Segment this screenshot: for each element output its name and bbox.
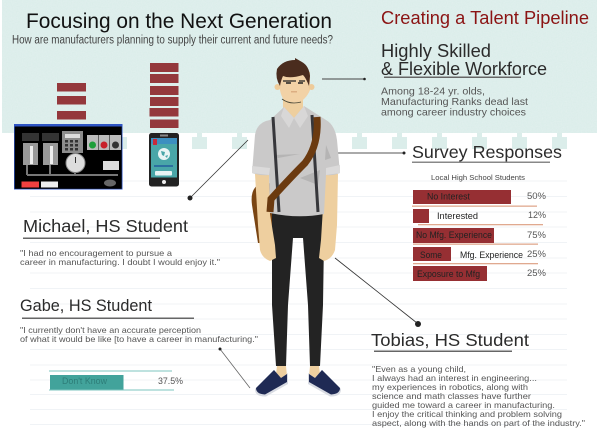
panel: teal header background (2, 0, 597, 149)
caption: local high school students: Local High School Students (431, 175, 526, 182)
bar chart: survey responses: Exposure to Mfg (417, 269, 480, 280)
heading: michael: Michael, HS Student (23, 216, 188, 236)
bar chart: survey responses: 75% (527, 230, 547, 241)
quote: gabe: of what it would be like [to have a career in manufacturing." (20, 334, 258, 344)
heading: highly skilled workforce (381, 41, 547, 79)
shirt (252, 106, 340, 216)
quote: tobias: my experiences in robotics, along with (372, 382, 528, 392)
bar chart: survey responses: 25% (527, 268, 547, 279)
quote: michael: career in manufacturing. I doubt I would enjoy it." (20, 257, 220, 267)
heading: creating a talent pipeline: Creating a Talent Pipeline (381, 8, 589, 28)
bag (252, 183, 272, 243)
quote: tobias: science and math classes have further (372, 391, 531, 401)
neck (283, 98, 303, 122)
hair (276, 58, 310, 86)
quote: tobias: "Even as a young child, (372, 364, 466, 374)
ankles (276, 366, 320, 379)
quote: gabe: "I currently don't have an accurate perception (20, 325, 201, 335)
right shoe (308, 370, 341, 397)
heading: highly skilled workforce: Highly Skilled (381, 41, 491, 61)
icon: tall brick stack (150, 63, 178, 128)
strap (270, 117, 317, 212)
quote: tobias: I enjoy the critical thinking and problem solving (372, 409, 562, 419)
quote: michael: "I had no encouragement to pursue a (20, 248, 172, 258)
suspenders (273, 115, 318, 212)
collar (281, 106, 308, 128)
title: Focusing on the Next Generation (26, 9, 332, 33)
bar chart: survey responses: No Mfg. Experience (416, 230, 492, 241)
heading: tobias: Tobias, HS Student (371, 330, 529, 350)
bar chart: survey responses: 50% (527, 191, 547, 202)
arrow: gabe quote to shoe (218, 348, 250, 388)
bar chart: survey responses: 12% (528, 210, 547, 221)
bar chart: don't know: 37.5% (158, 376, 184, 387)
text block: workforce statistic: among career industry choices (381, 106, 526, 118)
illustration: student figure (252, 58, 341, 397)
bar chart: survey responses (412, 190, 547, 281)
glasses (283, 80, 305, 82)
arrow: person to tobias (335, 258, 421, 327)
bar chart: survey responses: Interested (437, 211, 478, 222)
quote: tobias: guided me toward a career in manufacturing. (372, 400, 555, 410)
bar chart: survey responses: 25% (527, 249, 547, 260)
bar chart: don't know (49, 370, 184, 390)
left shoe (255, 370, 288, 397)
quote: tobias (372, 364, 585, 428)
bar chart: survey responses: No Interest (427, 192, 470, 202)
bar chart: don't know: Don't Know (62, 376, 107, 386)
arrow: person to michael (188, 140, 248, 200)
heading: survey responses: Survey Responses (412, 142, 562, 162)
quote: michael (20, 248, 220, 267)
head (279, 72, 310, 104)
heading: gabe: Gabe, HS Student (20, 297, 152, 315)
icon: control panel screen (14, 124, 122, 190)
text block: workforce statistic: Manufacturing Ranks dead last (381, 96, 528, 108)
quote: gabe (20, 325, 258, 344)
arms (255, 174, 276, 261)
text block: workforce statistic: Among 18-24 yr. olds, (381, 86, 485, 98)
arrow: head to workforce (322, 78, 366, 80)
icon: smartphone (149, 133, 179, 186)
bar chart: survey responses: Some (420, 250, 442, 261)
text block: workforce statistic (381, 86, 528, 118)
quote: tobias: aspect, along with the hands on part of the industry." (372, 418, 585, 428)
subtitle: How are manufacturers planning to supply their current and future needs? (12, 34, 333, 46)
quote: tobias: I always had an interest in engineering... (372, 373, 537, 383)
icon: short brick stack (57, 83, 86, 120)
heading: highly skilled workforce: & Flexible Workforce (381, 59, 547, 79)
bar chart: survey responses: Mfg. Experience (460, 250, 523, 261)
legs and trousers (270, 210, 325, 366)
arrow: person to survey (333, 152, 406, 154)
